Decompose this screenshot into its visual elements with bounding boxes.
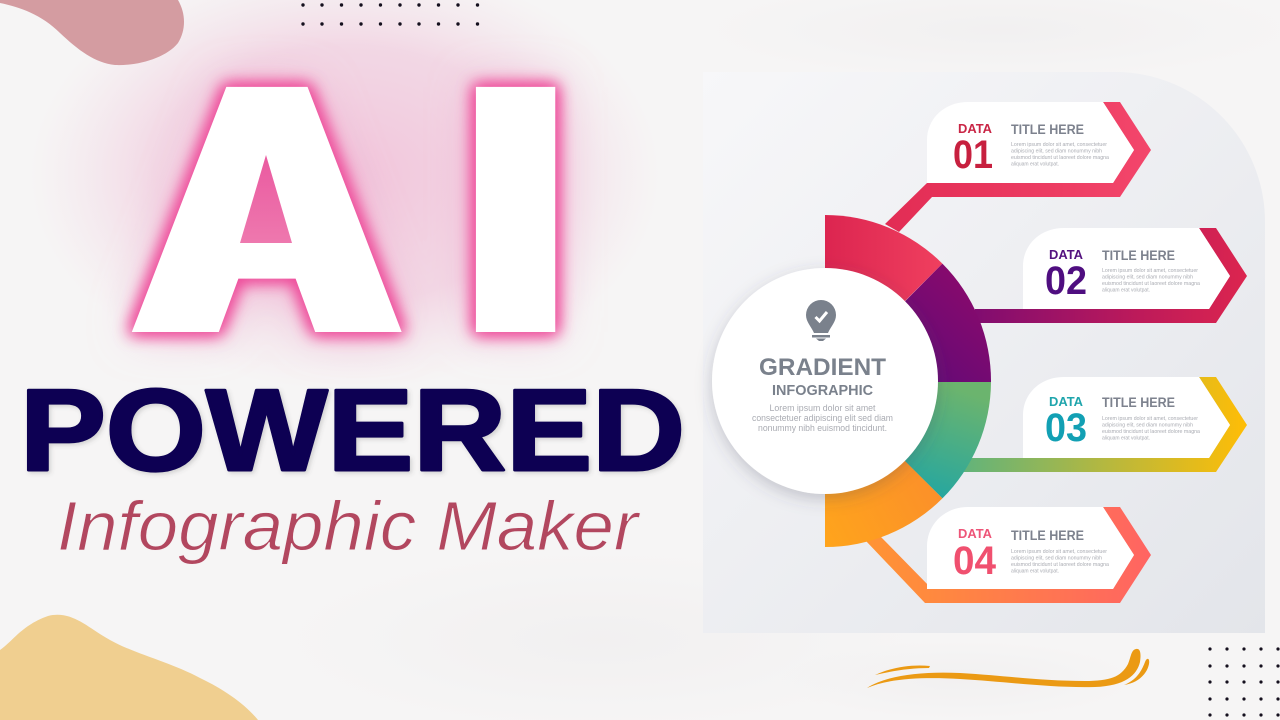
card 3: Lorem ipsum dolor sit amet, consectetuer (1102, 416, 1198, 422)
heading: INFOGRAPHIC: INFOGRAPHIC (772, 382, 873, 399)
text block: centre description (752, 403, 893, 433)
title: AI: I (474, 40, 558, 379)
card 2: 02 (1045, 259, 1087, 303)
panel: infographic card (703, 72, 1265, 633)
card 2: TITLE HERE (1102, 248, 1175, 263)
segmented ring (825, 215, 991, 547)
title: AI (151, 40, 558, 379)
title: AI: A (151, 40, 383, 379)
card 3: euismod tincidunt ut laoreet dolore magna (1102, 429, 1200, 435)
card 1: TITLE HERE (1011, 122, 1084, 137)
heading: GRADIENT: GRADIENT (759, 354, 886, 381)
card 4: adipiscing elit, sed diam nonummy nibh (1011, 556, 1102, 562)
card 1: DATA (958, 121, 993, 136)
ribbon 1 (885, 102, 1151, 232)
swoosh (867, 649, 1149, 688)
card 2: aliquam erat volutpat. (1102, 288, 1150, 294)
dot grid: bottom right (1208, 647, 1280, 717)
title: POWERED: POWERED (20, 365, 685, 495)
card 3: aliquam erat volutpat. (1102, 436, 1150, 442)
blob: top-left pink (0, 0, 184, 65)
card 1 (927, 102, 1134, 183)
text block: centre description: consectetuer adipiscing elit sed diam (752, 413, 893, 423)
card 1: 01 (953, 133, 993, 177)
ribbon 2 (975, 228, 1247, 323)
card 1: euismod tincidunt ut laoreet dolore magna (1011, 155, 1109, 161)
card 2: euismod tincidunt ut laoreet dolore magna (1102, 281, 1200, 287)
subtitle: Infographic Maker: Infographic Maker (57, 487, 641, 565)
centre circle (712, 268, 938, 494)
card 2: adipiscing elit, sed diam nonummy nibh (1102, 274, 1193, 280)
card 2: DATA (1049, 247, 1084, 262)
card 4: TITLE HERE (1011, 528, 1084, 543)
text block: centre description: nonummy nibh euismod tincidunt. (758, 423, 887, 433)
card 3: adipiscing elit, sed diam nonummy nibh (1102, 422, 1193, 428)
card 2 (1023, 228, 1230, 309)
card 4: 04 (953, 539, 997, 583)
card 3: DATA (1049, 394, 1084, 409)
ribbon 3 (960, 377, 1247, 472)
card 2: Lorem ipsum dolor sit amet, consectetuer (1102, 268, 1198, 274)
card 3 (1023, 377, 1230, 458)
card 3: TITLE HERE (1102, 395, 1175, 410)
card 4 (927, 507, 1134, 589)
card 1: Lorem ipsum dolor sit amet, consectetuer (1011, 142, 1107, 148)
icon: light bulb with check (806, 300, 836, 341)
card 4: Lorem ipsum dolor sit amet, consectetuer (1011, 549, 1107, 555)
text block: centre description: Lorem ipsum dolor sit amet (770, 403, 876, 413)
ribbon 4 (866, 507, 1151, 603)
card 4: DATA (958, 526, 993, 541)
card 1: adipiscing elit, sed diam nonummy nibh (1011, 148, 1102, 154)
card 4: euismod tincidunt ut laoreet dolore magna (1011, 562, 1109, 568)
card 4: aliquam erat volutpat. (1011, 568, 1059, 574)
card 1: aliquam erat volutpat. (1011, 162, 1059, 168)
dot grid: top (301, 3, 479, 26)
blob: bottom-left beige (0, 615, 258, 720)
card 3: 03 (1045, 406, 1087, 450)
